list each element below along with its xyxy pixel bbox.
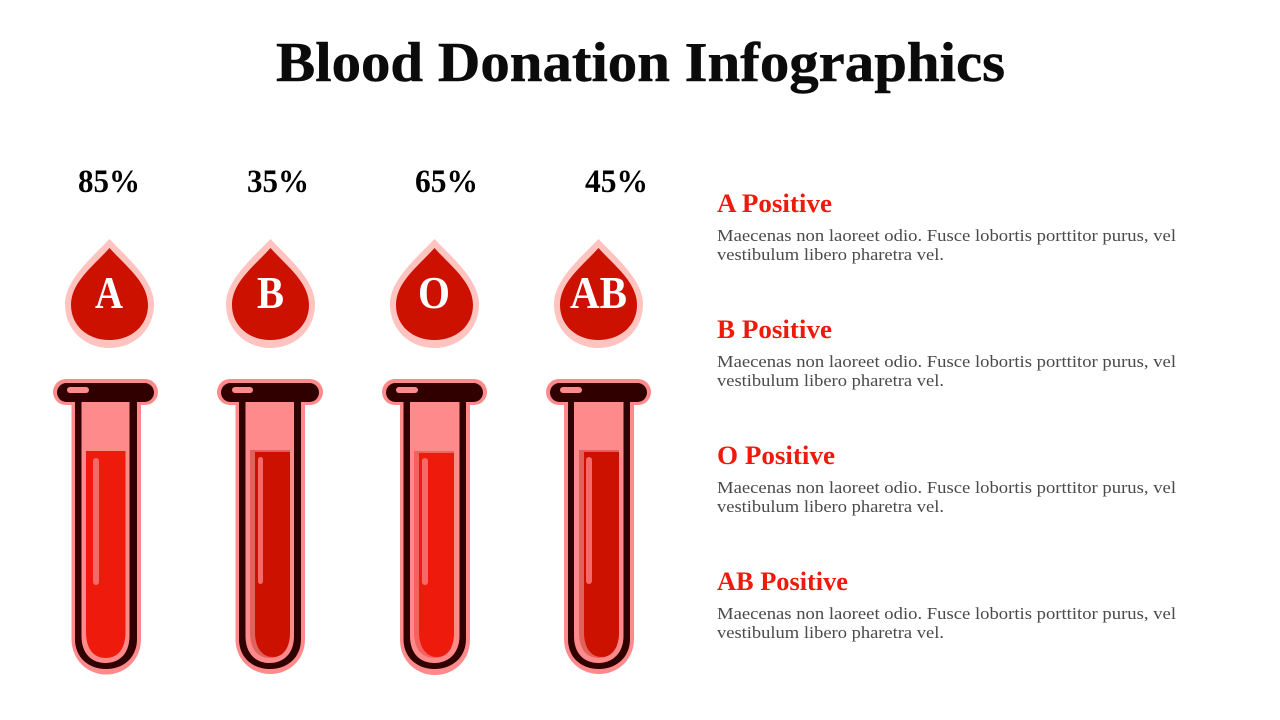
icon: blood drop B — [226, 239, 315, 348]
text block: A Positive: A Positive — [717, 189, 832, 218]
test tube AB — [546, 379, 651, 674]
icon: blood drop A: A — [95, 268, 123, 318]
test tube O — [382, 379, 487, 675]
text block: AB Positive: Maecenas non laoreet odio. Fusce lobortis porttitor purus, vel — [717, 604, 1176, 623]
percentage: A 85%: 85% — [78, 164, 140, 200]
percentage: AB 45%: 45% — [585, 164, 648, 200]
icon: blood drop AB — [554, 239, 643, 348]
text block: O Positive — [717, 441, 1176, 516]
icon: blood drop O: O — [418, 268, 450, 318]
icon: blood drop O — [390, 239, 479, 348]
text block: AB Positive — [717, 567, 1176, 642]
text block: O Positive: Maecenas non laoreet odio. Fusce lobortis porttitor purus, vel — [717, 478, 1176, 497]
text block: A Positive — [717, 189, 1176, 264]
text block: AB Positive: vestibulum libero pharetra vel. — [717, 623, 944, 642]
test tube A — [53, 379, 158, 674]
percentage: B 35%: 35% — [247, 164, 309, 200]
text block: B Positive: vestibulum libero pharetra vel. — [717, 371, 944, 390]
text block: A Positive: vestibulum libero pharetra vel. — [717, 245, 944, 264]
title: Blood Donation Infographics — [276, 32, 1005, 94]
percentage: O 65%: 65% — [415, 164, 478, 200]
test tube B — [217, 379, 323, 674]
text block: A Positive: Maecenas non laoreet odio. Fusce lobortis porttitor purus, vel — [717, 226, 1176, 245]
text block: O Positive: O Positive — [717, 441, 835, 470]
text block: B Positive: B Positive — [717, 315, 832, 344]
icon: blood drop A — [65, 239, 154, 348]
text block: AB Positive: AB Positive — [717, 567, 848, 596]
text block: B Positive — [717, 315, 1176, 390]
text block: O Positive: vestibulum libero pharetra vel. — [717, 497, 944, 516]
icon: blood drop B: B — [257, 268, 284, 318]
icon: blood drop AB: AB — [570, 268, 627, 318]
text block: B Positive: Maecenas non laoreet odio. Fusce lobortis porttitor purus, vel — [717, 352, 1176, 371]
